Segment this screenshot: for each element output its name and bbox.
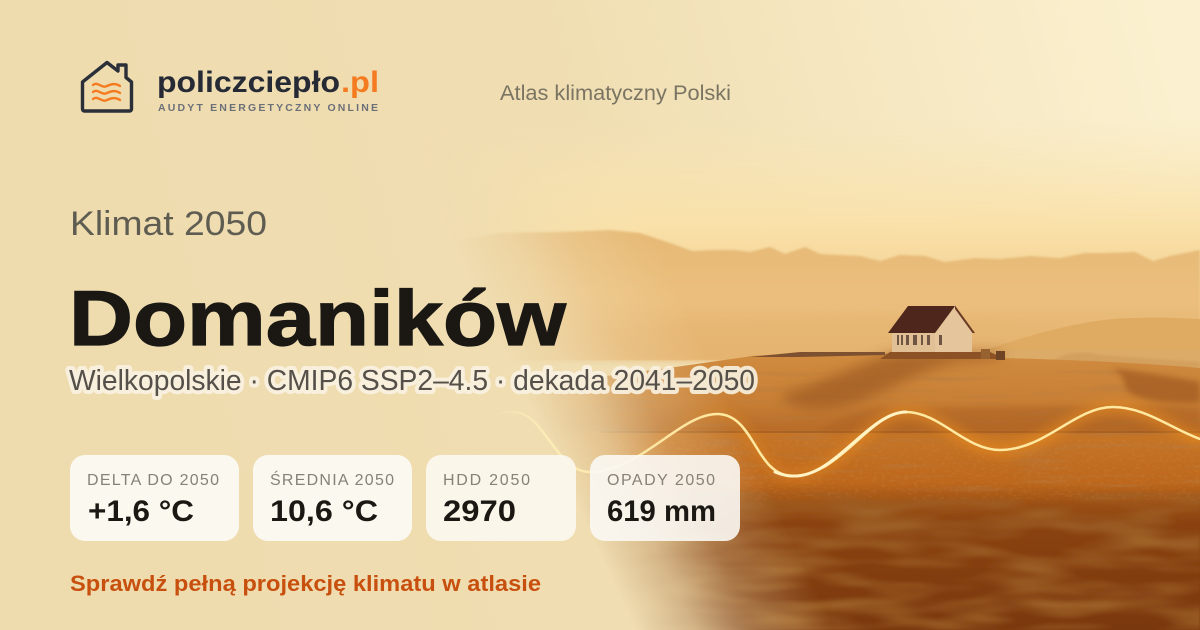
call to action: Sprawdź pełną projekcję klimatu w atlasie bbox=[70, 571, 541, 596]
logo domain: .pl bbox=[341, 66, 379, 99]
stat card: HDD: HDD 2050 bbox=[443, 472, 530, 489]
stat card: precipitation bbox=[590, 455, 740, 541]
dark hill shadow band bbox=[844, 407, 1198, 424]
right hill bbox=[985, 318, 1200, 352]
atlas label: Atlas klimatyczny Polski bbox=[500, 82, 731, 105]
stat card: HDD bbox=[426, 455, 576, 541]
field streak texture bbox=[646, 370, 1200, 495]
strip on horizon bbox=[750, 352, 885, 357]
title: Domaników bbox=[69, 274, 566, 362]
stat card: average: 10,6 °C bbox=[270, 495, 378, 528]
stat card: average: ŚREDNIA 2050 bbox=[270, 470, 394, 489]
shadow below house bbox=[780, 352, 1004, 409]
subtitle: Wielkopolskie · CMIP6 SSP2–4.5 · dekada 2041–2050 bbox=[69, 365, 755, 397]
stat card: delta bbox=[70, 455, 239, 541]
stat card: delta: +1,6 °C bbox=[88, 495, 194, 528]
logo wordmark: policzciepło bbox=[157, 66, 340, 99]
logo tagline: AUDYT ENERGETYCZNY ONLINE bbox=[158, 102, 378, 114]
field bbox=[538, 354, 1200, 630]
icon: house with heat waves bbox=[82, 62, 132, 111]
kicker: Klimat 2050 bbox=[70, 205, 267, 243]
subtitle: Wielkopolskie · CMIP6 SSP2–4.5 · dekada 2041–2050 bbox=[69, 365, 755, 397]
house bbox=[880, 306, 1005, 360]
wheat dark texture bbox=[660, 493, 1200, 630]
stat card: HDD: 2970 bbox=[443, 495, 516, 528]
logo bbox=[82, 62, 379, 114]
stat card: average bbox=[253, 455, 412, 541]
stat card: delta: DELTA DO 2050 bbox=[87, 472, 219, 489]
stat card: precipitation: OPADY 2050 bbox=[607, 472, 715, 489]
stat card: precipitation: 619 mm bbox=[607, 495, 716, 528]
right dune shadow bbox=[1110, 368, 1200, 403]
hazy mid hills bbox=[588, 360, 722, 364]
wheat grain texture bbox=[756, 485, 1192, 500]
distant bushes bbox=[1056, 354, 1200, 367]
background landscape bbox=[482, 148, 1200, 630]
glowing temperature wave bbox=[490, 407, 1200, 476]
distant tree line bbox=[400, 230, 1200, 360]
